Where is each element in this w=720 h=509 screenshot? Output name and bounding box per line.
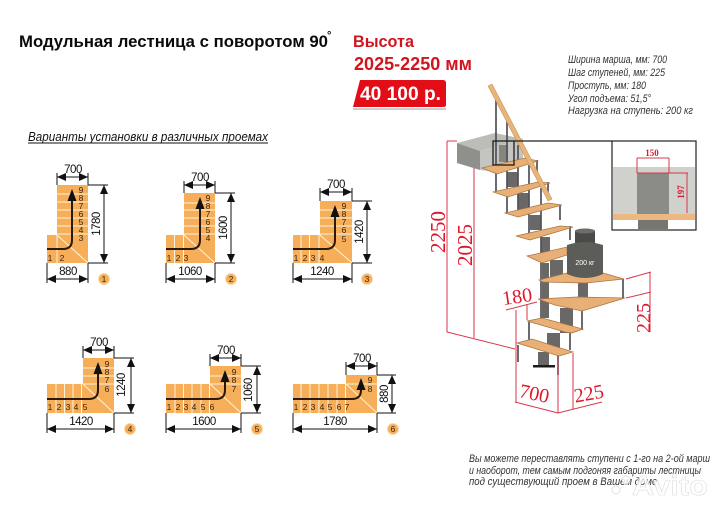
plan variant 1 (47, 164, 110, 284)
plan variant 1: 7 (79, 201, 84, 211)
plan variant 6: 1 (294, 402, 299, 412)
plan variant 6: 2 (303, 402, 308, 412)
plan variant 1: 6 (79, 209, 84, 219)
height label: Высота (353, 32, 415, 51)
plan variant 4: 1420 (69, 416, 93, 428)
specifications list: Ширина марша, мм: 700 (568, 54, 668, 66)
plan variant 5: 7 (232, 384, 237, 394)
plan variant 5: 1060 (243, 378, 255, 402)
watermark: Avito (632, 470, 708, 501)
plan variant 2: 1600 (218, 216, 230, 240)
central stringer (507, 172, 588, 368)
plan variant 2: 5 (206, 225, 211, 235)
balusters (496, 100, 623, 375)
plan variant 4: 4 (74, 402, 79, 412)
plan variant 2: 2 (229, 274, 234, 284)
plan variant 1: 880 (59, 266, 77, 278)
plan variant 2: 6 (206, 217, 211, 227)
plan variant 1: 1 (48, 253, 53, 263)
plan variant 4: 3 (66, 402, 71, 412)
plan variant 1: 4 (79, 225, 84, 235)
plan variant 6: 700 (353, 353, 371, 365)
plan variant 6: 6 (391, 424, 396, 434)
specifications list (567, 54, 693, 117)
plan variant 3: 8 (342, 209, 347, 219)
plan variant 1: 700 (64, 164, 82, 176)
load barrel (567, 228, 603, 278)
bottom note (469, 453, 710, 488)
specifications list: Шаг ступеней, мм: 225 (568, 67, 666, 79)
plan variant 3: 6 (342, 225, 347, 235)
magnifier frame (493, 141, 612, 165)
plan variant 6: 1780 (323, 416, 347, 428)
plan variant 1: 1780 (91, 212, 103, 236)
plan variant 3: 7 (342, 217, 347, 227)
plan variant 3: 700 (327, 179, 345, 191)
plan variant 4: 7 (105, 375, 110, 385)
plan variant 4: 5 (83, 402, 88, 412)
plan variant 6: 4 (320, 402, 325, 412)
plan variant 6: 9 (368, 375, 373, 385)
plan variant 5: 5 (255, 424, 260, 434)
plan variant 4: 8 (105, 367, 110, 377)
handrail (488, 84, 552, 201)
title: Модульная лестница с поворотом 90 (19, 33, 328, 51)
price badge: 40 100 р. (360, 84, 441, 105)
specifications list: Проступь, мм: 180 (568, 80, 647, 92)
plan variant 5: 3 (184, 402, 189, 412)
plan variant 4: 2 (57, 402, 62, 412)
plan variant 5: 1 (167, 402, 172, 412)
plan variant 3: 3 (365, 274, 370, 284)
plan variant 1: 1 (102, 274, 107, 284)
plan variant 4: 4 (128, 424, 133, 434)
plan variant 5: 5 (201, 402, 206, 412)
plan variant 2 (166, 172, 236, 284)
steps (482, 158, 625, 356)
plan variant 6 (293, 353, 398, 434)
plan variant 6: 5 (328, 402, 333, 412)
red dimensions: 700 (517, 380, 551, 408)
upper floor slab (457, 133, 523, 172)
height range: 2025-2250 мм (354, 54, 472, 74)
red dimensions: 2025 (453, 224, 477, 266)
plan variant 3 (293, 179, 372, 284)
detail inset (612, 141, 696, 230)
plan variant 3: 2 (303, 253, 308, 263)
plan variant 2: 7 (206, 209, 211, 219)
plan variant 3: 1 (294, 253, 299, 263)
plan variant 2: 8 (206, 201, 211, 211)
plan variant 5 (166, 345, 262, 434)
specifications list: Угол подъема: 51,5° (567, 93, 651, 105)
plan variant 3: 1240 (310, 266, 334, 278)
plan variant 5: 1600 (192, 416, 216, 428)
plan variant 6: 8 (368, 384, 373, 394)
detail inset: 150 (645, 148, 659, 158)
plan variant 5: 2 (176, 402, 181, 412)
price badge (353, 80, 446, 110)
red dimensions (426, 141, 655, 413)
plan variant 2: 2 (176, 253, 181, 263)
plan variant 3: 5 (342, 234, 347, 244)
plan variant 4: 6 (105, 384, 110, 394)
plan variant 3: 9 (342, 201, 347, 211)
plan variant 5: 9 (232, 367, 237, 377)
plan variant 1: 8 (79, 193, 84, 203)
plan variant 1: 5 (79, 217, 84, 227)
degree mark: ° (327, 30, 331, 42)
plan variant 4: 9 (105, 359, 110, 369)
plan variant 4 (47, 337, 136, 434)
red dimensions: 180 (501, 284, 534, 310)
plan variant 1: 3 (79, 233, 84, 243)
plan variant 1: 9 (79, 185, 84, 195)
plan variant 5: 700 (217, 345, 235, 357)
plan variant 2: 4 (206, 233, 211, 243)
plan variant 6: 3 (311, 402, 316, 412)
plan variant 2: 700 (191, 172, 209, 184)
plan variant 2: 1 (167, 253, 172, 263)
stair illustration (457, 84, 625, 375)
plan variant 2: 1060 (178, 266, 202, 278)
plan variant 6: 6 (337, 402, 342, 412)
subheading: Варианты установки в различных проемах (28, 130, 269, 144)
plan variant 3: 3 (311, 253, 316, 263)
plan variant 5: 8 (232, 375, 237, 385)
plan variant 2: 9 (206, 193, 211, 203)
red dimensions: 2250 (426, 211, 450, 253)
plan variant 3: 1420 (354, 220, 366, 244)
red dimensions: 225 (633, 303, 655, 333)
plan variant 3: 4 (320, 253, 325, 263)
plan variant 4: 1240 (116, 373, 128, 397)
plan variant 6: 880 (379, 385, 391, 403)
red dimensions: 225 (572, 381, 606, 408)
plan variant 1: 2 (60, 253, 65, 263)
plan variant 2: 3 (184, 253, 189, 263)
bottom note: под существующий проем в Вашем доме. (469, 476, 660, 488)
plan variant 5: 6 (210, 402, 215, 412)
plan variant 6: 7 (345, 402, 350, 412)
specifications list: Нагрузка на ступень: 200 кг (568, 105, 693, 117)
plan variant 4: 700 (90, 337, 108, 349)
plan variant 4: 1 (48, 402, 53, 412)
detail inset: 197 (676, 185, 686, 199)
plan variant 5: 4 (192, 402, 197, 412)
load barrel: 200 кг (575, 260, 595, 267)
